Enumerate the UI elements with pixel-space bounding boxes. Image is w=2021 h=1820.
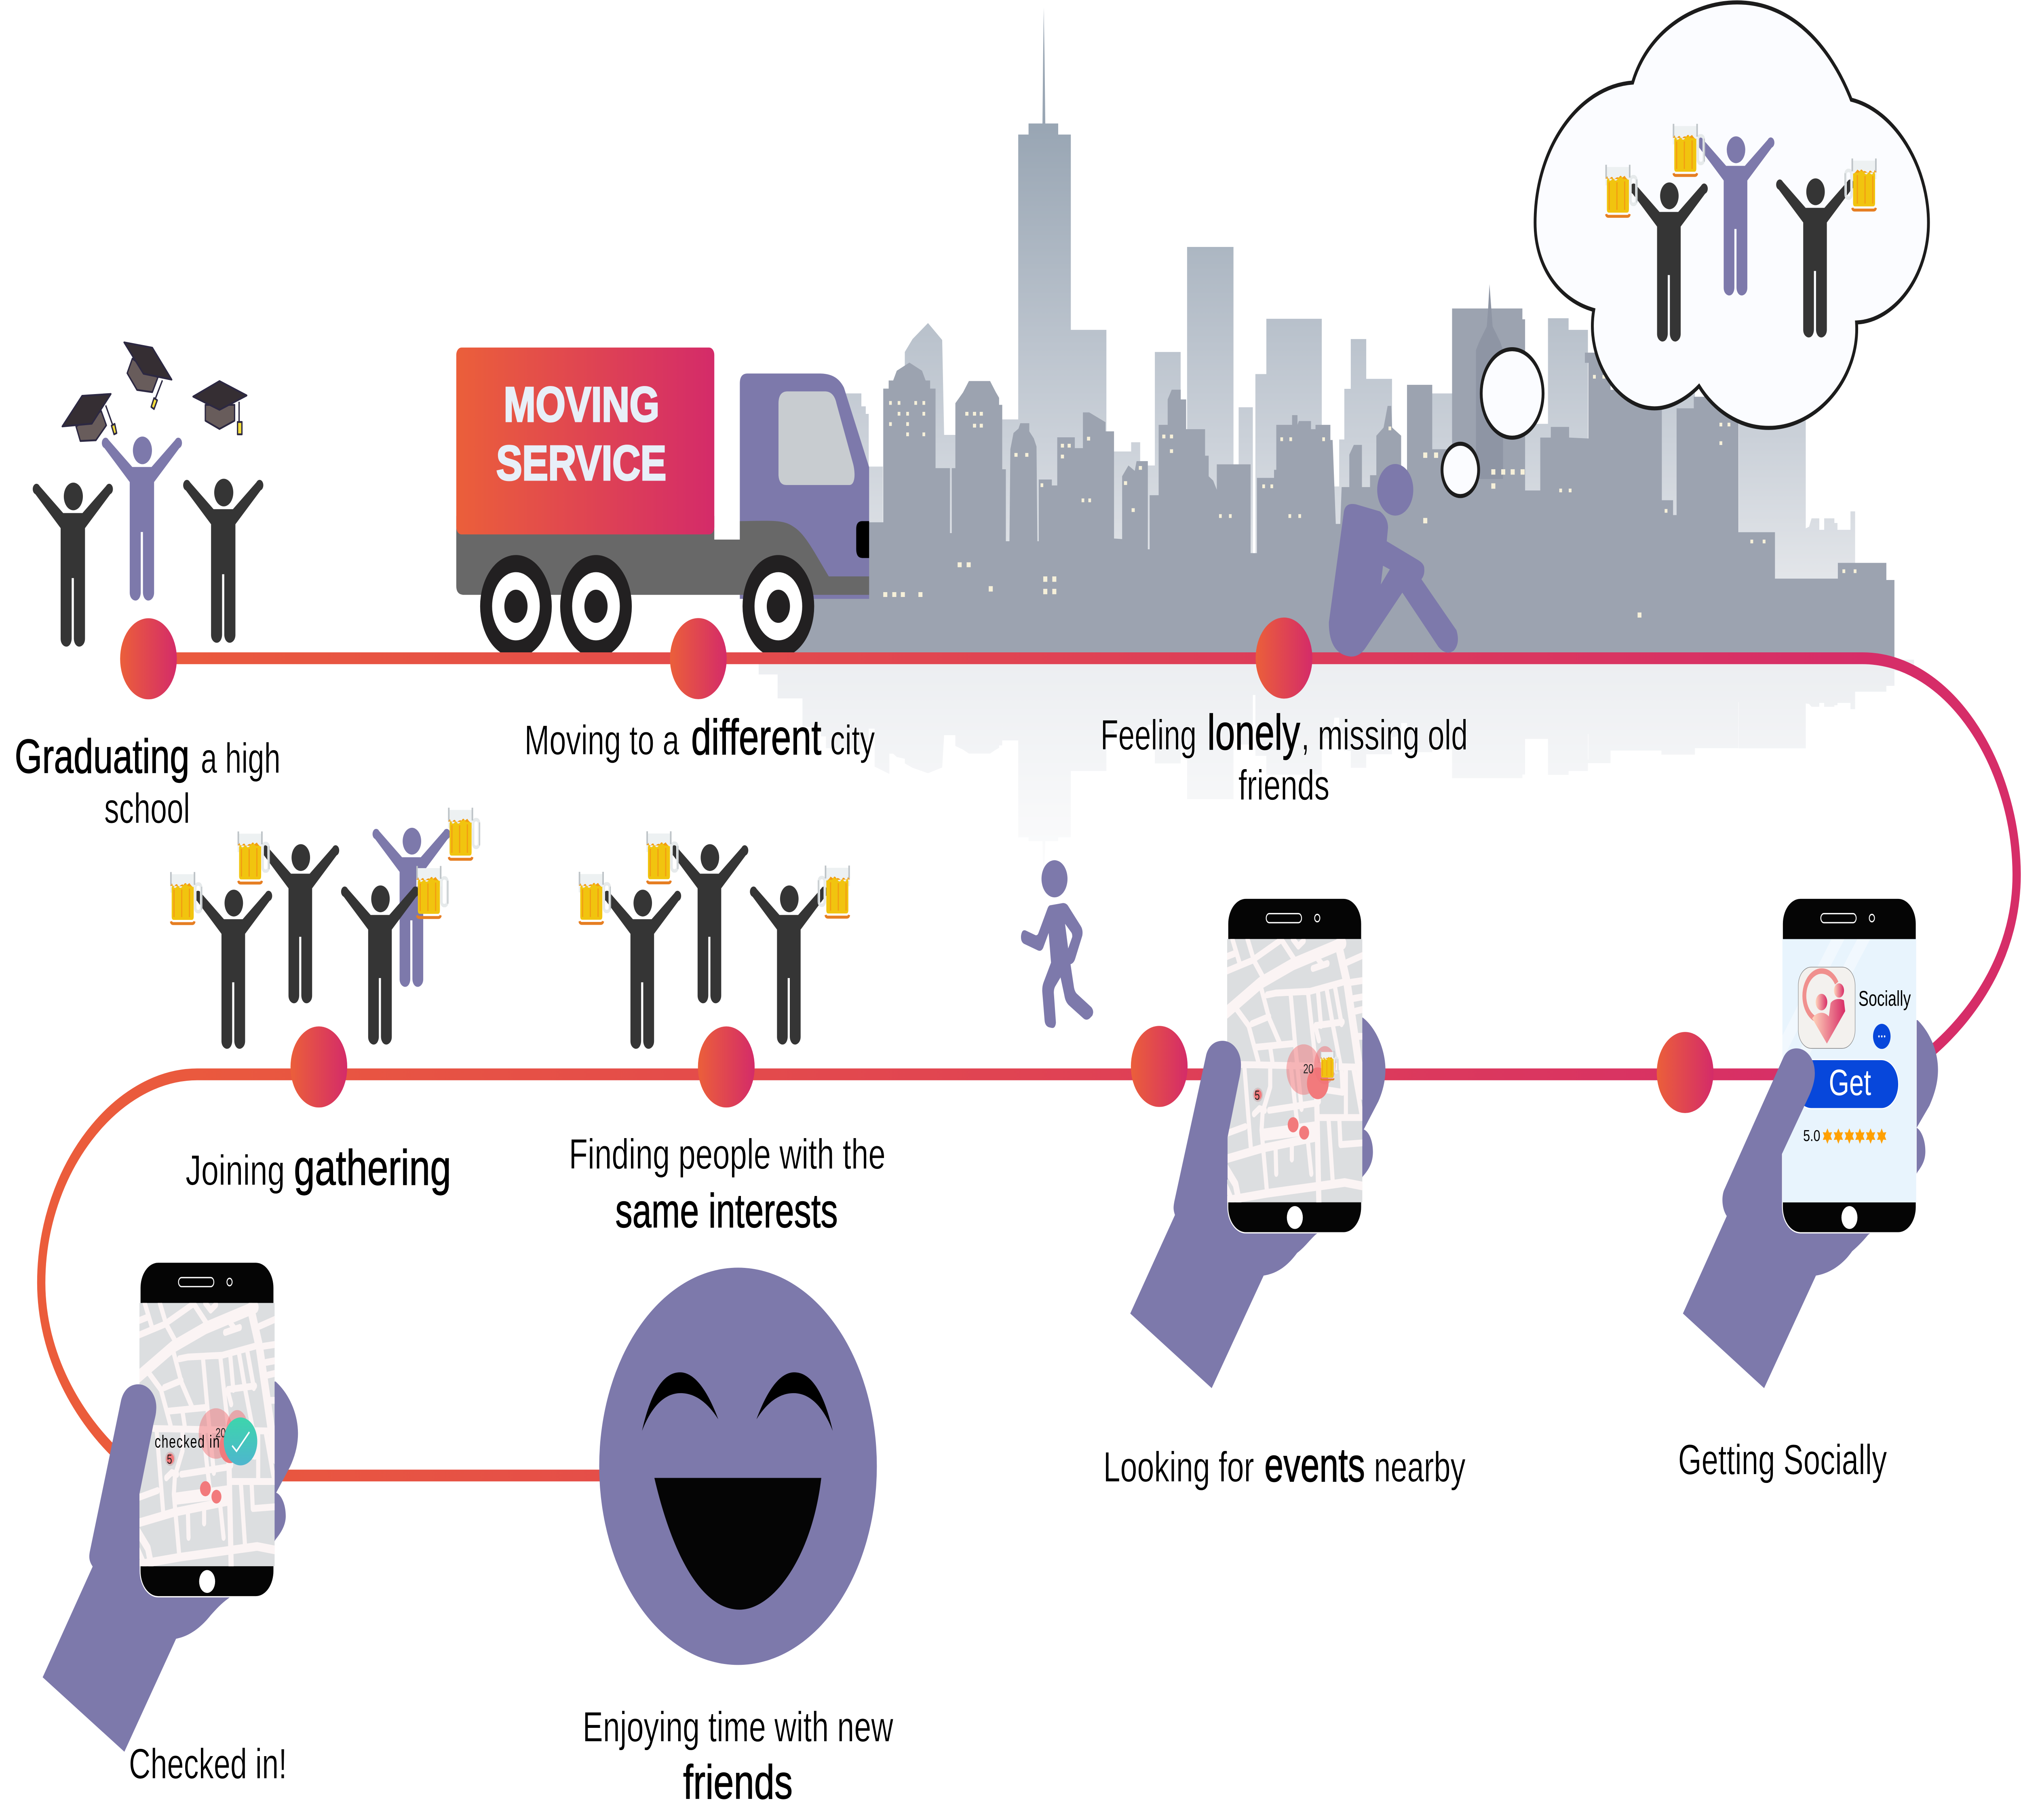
moving truck (456, 348, 869, 658)
phone with socially app in hand (1683, 898, 1938, 1388)
label: moving: Moving to a (525, 717, 679, 763)
friends imagined in the cloud (1605, 124, 1877, 342)
truck window (778, 391, 854, 485)
rating: 5.0 (1803, 1127, 1821, 1145)
label: lonely: Feeling (1101, 712, 1196, 759)
lonely sitting figure (1329, 464, 1458, 657)
truck label (496, 377, 667, 491)
truck cab (740, 373, 869, 599)
label: graduating: Graduating (15, 729, 190, 783)
label: moving: city (830, 717, 875, 763)
checked in label: checked in (155, 1432, 219, 1451)
truck cargo box (456, 348, 714, 534)
label: events (1103, 1438, 1466, 1492)
label: events: nearby (1374, 1444, 1466, 1491)
map screen (138, 1303, 276, 1566)
thought bubble small (1442, 444, 1479, 496)
gathering group (170, 808, 480, 1049)
truck chassis (456, 516, 869, 595)
phone body (140, 1262, 274, 1597)
mouth (654, 1478, 821, 1610)
label: lonely: , missing old (1301, 712, 1468, 759)
label: graduating (15, 729, 281, 832)
phone body (1783, 898, 1916, 1233)
milestone dots (120, 618, 1713, 1113)
right eye (756, 1372, 833, 1431)
label: moving: different (691, 709, 821, 765)
thumb (1722, 1048, 1815, 1244)
truck wheels (480, 555, 814, 658)
map screen: 20 (1303, 1061, 1314, 1076)
label: graduating: school (104, 785, 190, 832)
label: joining (186, 1140, 451, 1196)
label: moving (525, 709, 875, 765)
label: graduating: a high (201, 735, 281, 782)
hand back (43, 1381, 298, 1752)
timeline path (41, 658, 2017, 1476)
city skyline (786, 7, 1894, 659)
graduation cap left (62, 394, 117, 441)
app name: Socially (1859, 987, 1911, 1010)
thumb (1173, 1041, 1241, 1235)
map screen: 20 (215, 1426, 226, 1440)
more button (1873, 1024, 1890, 1049)
phone body (1228, 898, 1362, 1233)
laughing face (599, 1267, 877, 1665)
label: enjoying (582, 1704, 893, 1809)
graduation cap right (193, 381, 247, 434)
get button: Get (1829, 1062, 1871, 1103)
label: lonely: friends (1238, 762, 1329, 809)
label: finding: Finding people with the (569, 1131, 886, 1178)
app icon (1798, 967, 1855, 1048)
left eye (642, 1372, 718, 1431)
map screen: 5 (1255, 1088, 1260, 1103)
label: joining: gathering (294, 1140, 451, 1196)
map screen: 5 (167, 1452, 172, 1467)
thought cloud (1535, 2, 1928, 428)
app store screen (1783, 939, 1916, 1202)
graduates with caps (33, 342, 263, 647)
label: joining: Joining (186, 1147, 285, 1194)
walking figure (1021, 860, 1093, 1028)
check badge (224, 1417, 257, 1466)
label: enjoying: friends (683, 1755, 793, 1809)
truck label: SERVICE (496, 436, 667, 491)
hand back (1683, 1017, 1938, 1388)
thumb (89, 1384, 156, 1594)
label: getting socially: Getting Socially (1678, 1436, 1887, 1484)
truck grille (856, 521, 869, 558)
phone with check-in map in hand (43, 1262, 298, 1752)
label: lonely (1101, 704, 1468, 809)
phone with nearby events map in hand (1130, 898, 1386, 1388)
rating (1803, 1127, 1886, 1145)
label: enjoying: Enjoying time with new (582, 1704, 893, 1751)
truck label: MOVING (504, 377, 659, 432)
map screen (1226, 939, 1363, 1202)
skyline reflection (759, 660, 1914, 803)
label: lonely: lonely (1207, 704, 1300, 760)
label: finding (569, 1131, 886, 1238)
people with same interests (579, 831, 850, 1049)
label: checked in: Checked in! (129, 1740, 287, 1788)
hand back (1130, 1017, 1386, 1388)
thought bubble medium (1481, 349, 1543, 438)
label: finding: same interests (615, 1184, 838, 1238)
graduation cap centre (124, 342, 172, 409)
label: events: events (1264, 1438, 1365, 1492)
get button (1794, 1060, 1899, 1109)
label: events: Looking for (1103, 1444, 1254, 1491)
